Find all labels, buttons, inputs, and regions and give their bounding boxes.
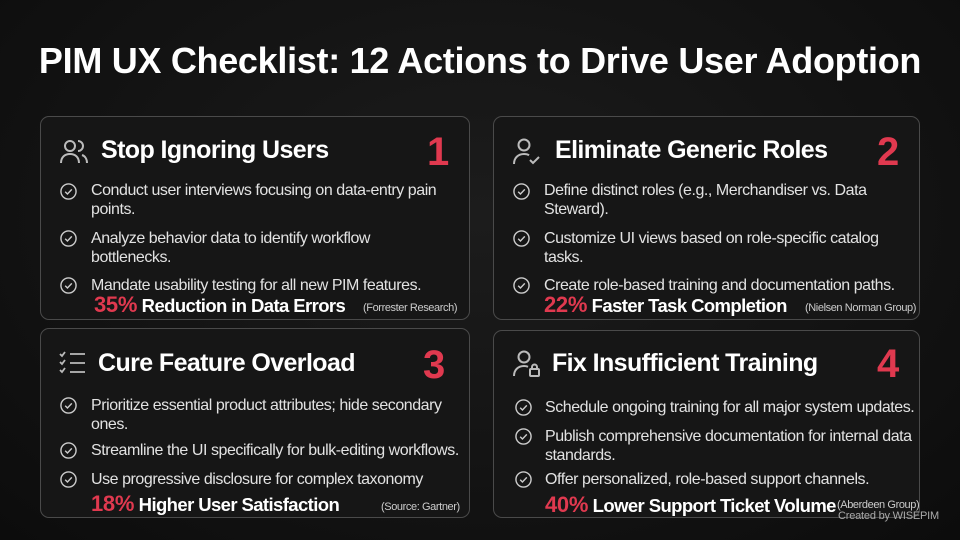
- bullets: Customize UI views based on role-specific catalog: [544, 230, 879, 247]
- bullets: [60, 182, 436, 294]
- bullets: Conduct user interviews focusing on data-entry pain: [91, 182, 436, 199]
- bullets: Create role-based training and documentation paths.: [544, 277, 895, 294]
- bullets: [513, 182, 895, 294]
- bullets: tasks.: [544, 249, 583, 266]
- stat: 22% Faster Task Completion: [544, 292, 787, 317]
- icon: checklist: [59, 352, 85, 374]
- bullets: standards.: [545, 447, 615, 464]
- credit: Created by WISEPIM: [838, 510, 939, 522]
- bullets: Analyze behavior data to identify workflow: [91, 230, 370, 247]
- heading: Stop Ignoring Users: [101, 136, 329, 164]
- number: 4: [877, 342, 899, 386]
- bullets: Steward).: [544, 201, 608, 218]
- bullets: Publish comprehensive documentation for internal data: [545, 428, 912, 445]
- heading: Eliminate Generic Roles: [555, 136, 827, 164]
- bullets: Schedule ongoing training for all major system updates.: [545, 399, 914, 416]
- source: (Source: Gartner): [381, 501, 460, 513]
- bullets: ones.: [91, 416, 128, 433]
- number: 3: [423, 343, 445, 387]
- bullets: Streamline the UI specifically for bulk-editing workflows.: [91, 442, 459, 459]
- panel: eliminate generic roles: [493, 116, 920, 320]
- number: 2: [877, 130, 899, 174]
- bullets: Offer personalized, role-based support channels.: [545, 471, 869, 488]
- bullets: Use progressive disclosure for complex taxonomy: [91, 471, 423, 488]
- panel: stop ignoring users: [40, 116, 470, 320]
- icon: user check: [513, 138, 540, 164]
- source: (Forrester Research): [363, 302, 457, 314]
- stat: 40% Lower Support Ticket Volume: [545, 492, 836, 517]
- bullets: Define distinct roles (e.g., Merchandiser vs. Data: [544, 182, 867, 199]
- title: PIM UX Checklist: 12 Actions to Drive User Adoption: [39, 40, 921, 81]
- bullets: points.: [91, 201, 135, 218]
- panel: cure feature overload: [40, 328, 470, 518]
- bullets: Mandate usability testing for all new PIM features.: [91, 277, 421, 294]
- stat: 18% Higher User Satisfaction: [91, 491, 339, 516]
- bullets: bottlenecks.: [91, 249, 171, 266]
- heading: Cure Feature Overload: [98, 349, 355, 377]
- number: 1: [427, 130, 449, 174]
- icon: user lock: [513, 350, 540, 377]
- heading: Fix Insufficient Training: [552, 349, 818, 377]
- bullets: [60, 397, 459, 488]
- bullets: Prioritize essential product attributes; hide secondary: [91, 397, 442, 414]
- source: (Nielsen Norman Group): [805, 302, 916, 314]
- icon: users: [60, 140, 88, 163]
- stat: 35% Reduction in Data Errors: [94, 292, 345, 317]
- bullets: [515, 399, 914, 488]
- panel: fix insufficient training: [493, 330, 920, 518]
- source: (Aberdeen Group): [837, 499, 919, 511]
